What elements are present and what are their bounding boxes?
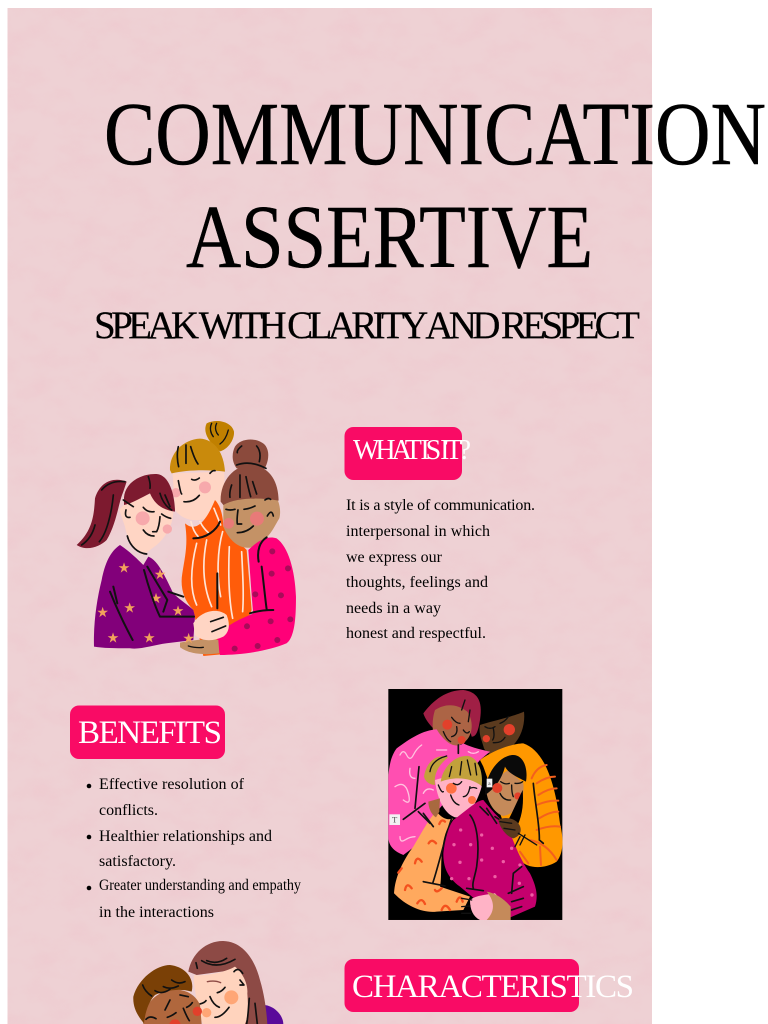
dark-haired girl <box>487 770 524 816</box>
text block: what is it description: we express our <box>346 549 443 566</box>
brown hand <box>180 639 219 654</box>
peach hand <box>193 611 229 640</box>
subtitle: SPEAK WITH CLARITY AND RESPECT <box>94 304 640 347</box>
back left hair and head <box>423 690 481 737</box>
illustration: three friends hugging: ★ <box>123 601 136 616</box>
pink sweater <box>388 729 490 855</box>
badge: characteristics <box>344 959 634 1012</box>
orange bun <box>205 421 234 451</box>
badge: benefits <box>70 706 225 759</box>
ponytail <box>77 480 127 548</box>
purple sweater with stars <box>94 545 195 649</box>
blonde head <box>173 472 224 520</box>
face <box>194 967 248 1024</box>
badge: characteristics: CHARACTERISTICS <box>352 969 634 1005</box>
list: benefits: in the interactions <box>99 904 214 921</box>
illustration: three friends hugging: ★ <box>150 592 162 607</box>
back right head <box>480 712 524 755</box>
illustration: three friends hugging: ★ <box>154 568 166 583</box>
badge: what is it: WHAT IS IT? <box>353 435 471 466</box>
text block: what is it description: honest and respectful. <box>346 625 486 642</box>
text block: what is it description: It is a style of communication. <box>346 497 535 514</box>
orange sweater <box>480 743 562 867</box>
boy face <box>143 990 202 1024</box>
illustration: three friends hugging: ★ <box>172 604 184 619</box>
list: benefits: Greater understanding and empathy <box>99 877 301 894</box>
text block: what is it description: interpersonal in which <box>346 523 490 540</box>
title: assertive: ASSERTIVE <box>186 188 593 287</box>
small white marker T <box>389 814 400 825</box>
illustration: three friends hugging: ★ <box>182 632 195 647</box>
list: benefits: satisfactory. <box>99 853 176 870</box>
small white marker <box>487 779 492 787</box>
illustration: three friends hugging: ★ <box>143 631 156 646</box>
text block: what is it description: needs in a way <box>346 600 441 617</box>
long hair <box>188 941 267 1024</box>
list: benefits: Effective resolution of <box>99 776 245 793</box>
yellow-peach sweater <box>394 812 470 912</box>
magenta sweater <box>443 800 537 918</box>
text block: what is it description: thoughts, feelings and <box>346 574 488 591</box>
text block: what is it description <box>346 497 535 642</box>
blonde girl <box>424 756 448 785</box>
maroon head <box>119 493 173 555</box>
illustration: four friends on black <box>388 689 562 920</box>
small white marker T: T <box>392 815 398 825</box>
badge: what is it <box>344 427 471 480</box>
small white marker: a <box>488 781 491 787</box>
boy hair <box>133 965 192 1023</box>
illustration: three friends hugging <box>77 421 296 656</box>
list: benefits: Healthier relationships and <box>99 828 272 845</box>
illustration: partially visible pair <box>133 941 283 1024</box>
pink sweater <box>217 537 296 655</box>
brown head and bun <box>233 440 268 470</box>
orange striped sweater <box>182 500 252 656</box>
illustration: three friends hugging: ★ <box>107 631 119 646</box>
illustration: three friends hugging: ★ <box>96 606 109 621</box>
list: benefits <box>87 776 301 921</box>
purple shoulder <box>265 1005 284 1024</box>
hands <box>428 798 440 817</box>
list: benefits: conflicts. <box>99 802 158 819</box>
illustration: three friends hugging: ★ <box>118 561 130 576</box>
badge: benefits: BENEFITS <box>78 715 222 751</box>
